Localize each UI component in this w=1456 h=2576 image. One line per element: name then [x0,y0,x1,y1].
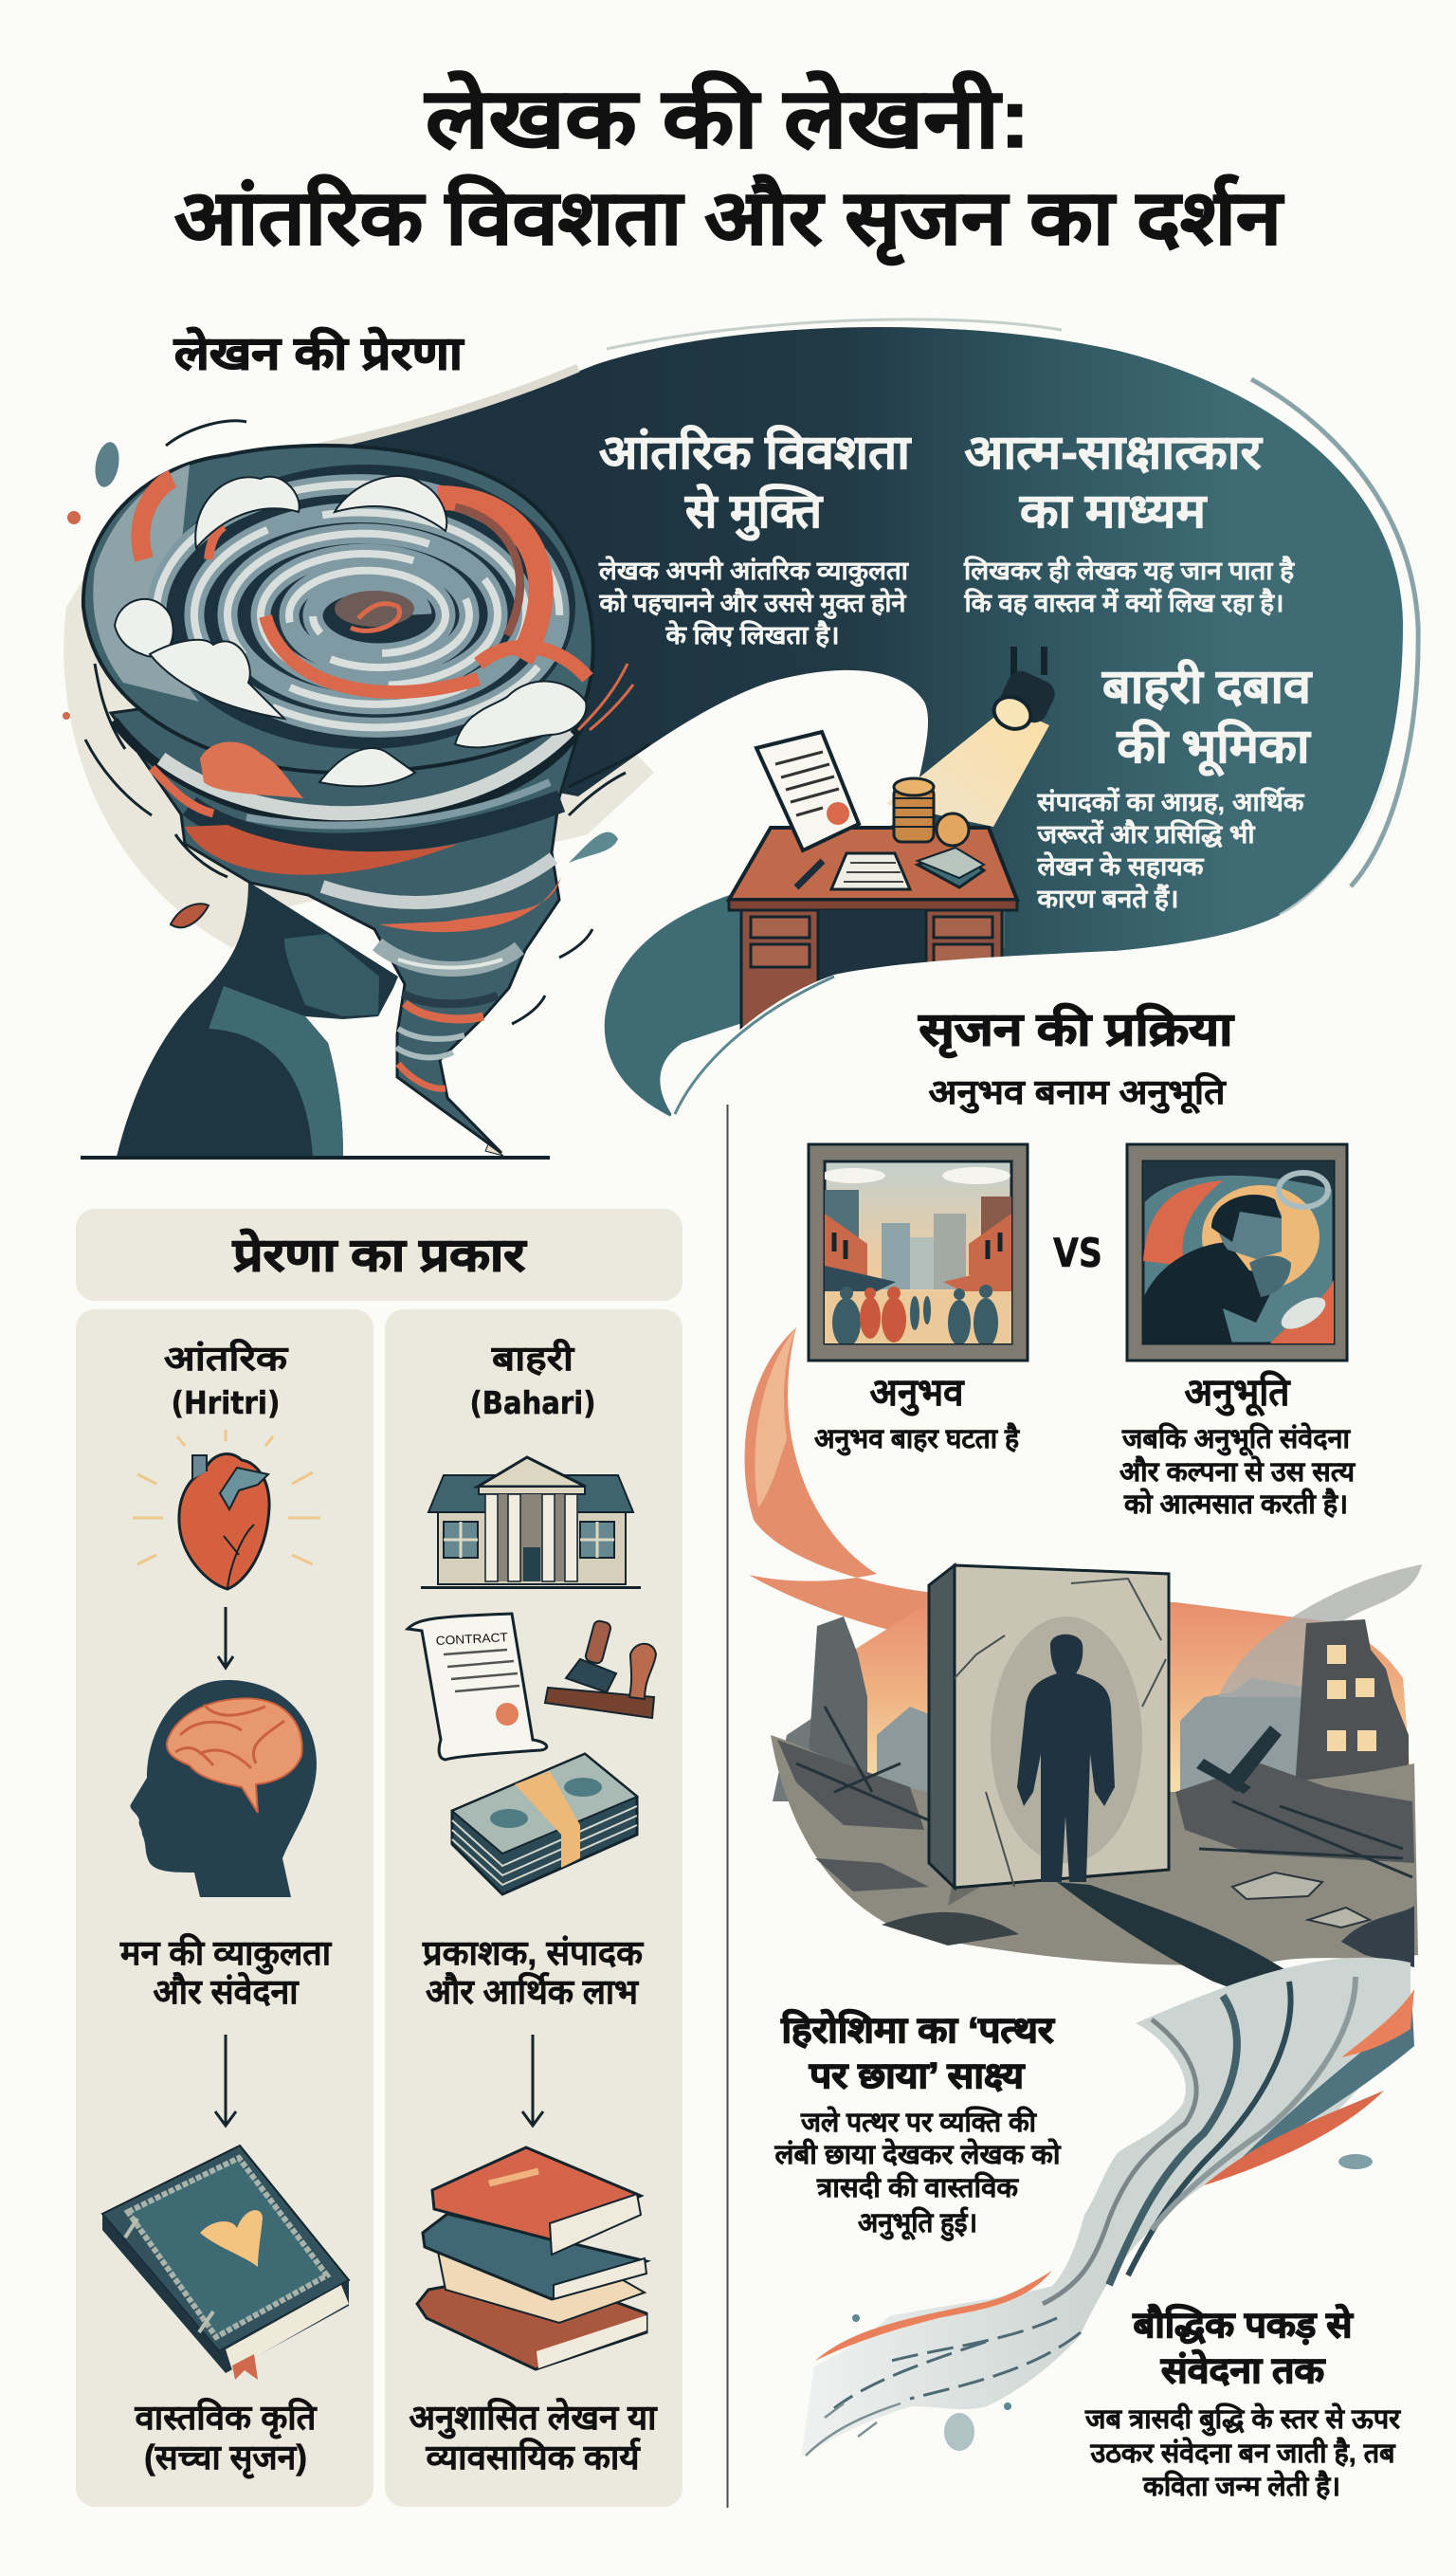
title [174,70,1284,265]
heading: antarik [164,1339,289,1421]
illustration: hiroshima scene [744,1327,1422,2010]
icon: head with brain [130,1680,317,1897]
desk [729,828,1017,1043]
text: hiroshima: अनुभूति हुई। [858,2206,977,2241]
text: antarik vivashta: से मुक्ति [684,484,823,541]
text: atma sakshatkar: लिखकर ही लेखक यह जान पाता है [963,556,1296,585]
illustration: teal tail sweep [605,891,1005,1119]
text: bauddhik pakad: बौद्धिक पकड़ से [1132,2304,1354,2346]
panel: prerna ka prakar header: प्रेरणा का प्रकार [232,1229,528,1281]
illustration: spotlight and desk [729,647,1059,1043]
text: hiroshima: हिरोशिमा का ‘पत्थर [780,2009,1055,2051]
text: hiroshima: पर छाया’ साक्ष्य [809,2056,1026,2096]
text: anushasit: व्यावसायिक कार्य [425,2438,642,2476]
text: anubhuti: और कल्पना से उस सत्य [1119,1455,1356,1488]
text: bauddhik pakad: उठकर संवेदना बन जाती है, तब [1090,2437,1396,2469]
text: anubhav: अनुभव [870,1372,965,1416]
text: anubhuti [1119,1370,1356,1520]
text: hiroshima: त्रासदी की वास्तविक [816,2171,1020,2203]
arrow [215,2035,236,2126]
text: anushasit [410,2398,658,2476]
icon: building [421,1457,641,1589]
text: vastavik kriti [134,2398,318,2479]
panel: prerna ka prakar header [76,1209,682,1301]
text: prakashak: और आर्थिक लाभ [426,1972,640,2011]
arrow [522,2035,543,2126]
text: man ki vyakulta: मन की व्याकुलता [119,1933,333,1975]
heading: bahari: बाहरी [491,1339,575,1378]
stone slab [929,1565,1169,1888]
arrow [218,1607,233,1668]
text: bahari dabav: संपादकों का आग्रह, आर्थिक [1036,787,1305,816]
text: anubhuti: को आत्मसात करती है। [1123,1488,1348,1520]
text: bauddhik pakad [1084,2304,1401,2502]
text: hiroshima: जले पत्थर पर व्यक्ति की [800,2106,1037,2138]
text: bauddhik pakad: कविता जन्म लेती है। [1142,2470,1340,2502]
text: atma sakshatkar: का माध्यम [1019,484,1208,538]
spotlight lamp [989,647,1059,735]
title: आंतरिक विवशता और सृजन का दर्शन [174,174,1284,265]
text: vastavik kriti: (सच्चा सृजन) [144,2438,307,2479]
text: anubhuti: जबकि अनुभूति संवेदना [1121,1422,1351,1456]
text: bahari dabav: लेखन के सहायक [1036,851,1205,881]
shadow of a person [1017,1635,1115,1882]
vs label: VS [1053,1230,1102,1276]
text: anubhav: अनुभव बाहर घटता है [814,1422,1021,1456]
spotlight beam [886,706,1049,827]
vertical divider [726,1105,728,2508]
sky [787,1602,1412,1801]
text: bahari dabav: बाहरी दबाव [1101,659,1313,713]
icon: contract: CONTRACT [435,1630,508,1648]
long shadow [1057,1882,1318,2010]
panel: internal column [76,1309,373,2507]
illustration: dark swoosh panel [318,320,1418,965]
illustration: head with tornado of thoughts [63,421,649,1160]
text: anubhav [814,1372,1021,1456]
coins [894,778,969,846]
text: hiroshima: लंबी छाया देखकर लेखक को [774,2138,1062,2170]
tornado mass of bands [111,664,580,1156]
illustration: white cut-out curve over desk [669,951,1232,1195]
icon: book stack [417,2147,646,2369]
icon: money stack [452,1754,637,1894]
text: man ki vyakulta [119,1933,333,2011]
text: atma sakshatkar: कि वह वास्तव में क्यों लिख रहा है। [963,588,1283,617]
icon: contract [408,1614,547,1760]
ruined buildings [773,1564,1422,1801]
icon: heart book [102,2146,349,2380]
icon: stamps [545,1619,656,1718]
text: atma sakshatkar [963,426,1296,617]
heading: srijan ki prakriya: अनुभव बनाम अनुभूति [929,1072,1227,1114]
heading: bahari [470,1339,595,1421]
text: bahari dabav [1036,659,1313,913]
text: bahari dabav: कारण बनते हैं। [1036,884,1179,913]
text: anubhuti: अनुभूति [1185,1370,1291,1416]
text: antarik vivashta: आंतरिक विवशता [599,425,912,479]
text: bahari dabav: की भूमिका [1116,719,1312,776]
illustration: beige wash behind tornado [64,493,654,948]
paint droplets and splashes [63,421,649,1024]
silhouette [81,882,550,1160]
panel: external column [385,1309,682,2507]
orange swoosh [744,1327,934,1640]
text: anushasit: अनुशासित लेखन या [410,2398,658,2439]
text: bauddhik pakad: संवेदना तक [1160,2349,1326,2391]
text: bahari dabav: जरूरतें और प्रसिद्धि भी [1036,819,1256,849]
illustration: framed city painting [809,1144,1028,1361]
heading: bahari: (Bahari) [470,1384,595,1421]
heading: antarik: आंतरिक [164,1339,289,1378]
title: लेखक की लेखनी: [424,70,1030,165]
rubble [777,1707,1414,1967]
text: prakashak: प्रकाशक, संपादक [422,1933,644,1972]
text: antarik vivashta: लेखक अपनी आंतरिक व्याकुलता [598,556,909,587]
clouds [115,476,586,798]
tornado bowl and spiral [83,446,593,813]
text: prakashak [422,1933,644,2011]
document [756,732,859,850]
illustration: flowing river of ink [801,1958,1414,2457]
panel: blob text [598,425,1313,913]
text: antarik vivashta: को पहचानने और उससे मुक्त होने [598,588,907,619]
heading: lekhan ki prerna: लेखन की प्रेरणा [173,327,464,379]
text: atma sakshatkar: आत्म-साक्षात्कार [965,426,1263,479]
text: hiroshima [774,2009,1062,2241]
text: antarik vivashta: के लिए लिखता है। [664,620,840,649]
ground [771,1735,1418,1965]
text: man ki vyakulta: और संवेदना [154,1972,300,2011]
heading: antarik: (Hritri) [171,1384,281,1421]
icon: heart [133,1430,320,1589]
text: vastavik kriti: वास्तविक कृति [134,2398,318,2439]
heading: srijan ki prakriya [918,1003,1234,1114]
heading: srijan ki prakriya: सृजन की प्रक्रिया [918,1003,1234,1058]
illustration: framed anguished man painting [1127,1144,1347,1361]
text: bauddhik pakad: जब त्रासदी बुद्धि के स्तर से ऊपर [1084,2402,1401,2437]
text: antarik vivashta [598,425,912,649]
